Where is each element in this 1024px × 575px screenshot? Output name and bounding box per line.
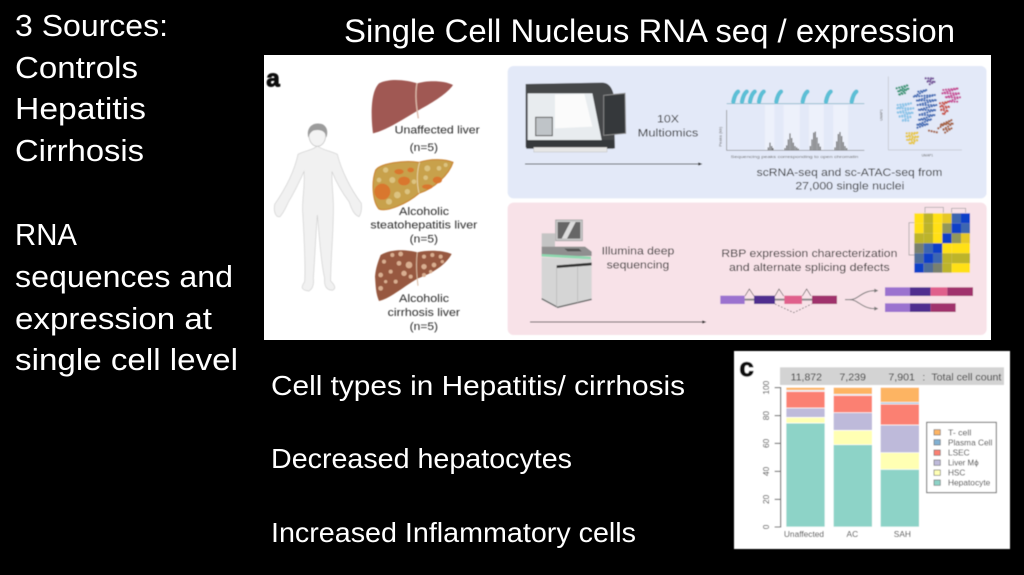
y axis: 40 (761, 466, 771, 476)
panel: patient cohort (266, 65, 480, 333)
legend: T- cell (948, 427, 971, 437)
text block: sources and RNA summary: RNA (15, 217, 77, 252)
label: scRNA-seq caption (757, 167, 942, 193)
label: RBP expression: RBP expression charecterization (721, 248, 897, 260)
chart: sequencing peaks: Sequencing peaks corresponding to open chromatin (731, 154, 858, 159)
y axis: 60 (761, 438, 771, 448)
legend: Hepatocyte (948, 478, 991, 488)
label: Illumina deep sequencing (602, 245, 674, 271)
total cell count band (780, 367, 1004, 385)
chart: heatmap (909, 207, 970, 273)
text block: sources and RNA summary (15, 8, 238, 377)
x axis labels: Unaffected (784, 529, 824, 539)
total cell count band: 11,872 (791, 372, 822, 383)
text block: sources and RNA summary: single cell level (15, 342, 238, 377)
total cell count band: 7,901 (888, 372, 915, 383)
legend (927, 422, 996, 493)
diagram: exon splicing (720, 289, 837, 313)
icon: human body (274, 124, 362, 291)
icon: unaffected liver (372, 80, 453, 133)
bar: AC (833, 387, 872, 527)
text block: sources and RNA summary: expression at (15, 301, 212, 336)
text block: cell type findings: Increased Inflammatory cells (271, 517, 636, 548)
arrow: alternate splicing fork (845, 289, 878, 311)
x axis labels: SAH (894, 529, 911, 539)
legend: Plasma Cell (948, 437, 992, 447)
y axis (761, 380, 781, 529)
total cell count band: 7,239 (839, 372, 866, 383)
bar: Unaffected (786, 387, 825, 527)
panel letter c: c (739, 352, 754, 382)
bar: SAH (880, 387, 919, 527)
label: alcoholic cirrhosis liver (388, 293, 460, 333)
title: Single Cell Nucleus RNA seq / expression (344, 13, 955, 49)
chart: sequencing peaks (718, 92, 864, 159)
y axis: 20 (761, 494, 771, 504)
y axis: 100 (761, 380, 771, 395)
panel: stacked bar chart c (734, 351, 1010, 549)
label: alcoholic steatohepatitis liver: Alcoholic (399, 206, 450, 218)
label: Illumina deep sequencing: sequencing (607, 259, 669, 271)
text block: cell type findings: Decreased hepatocytes (271, 443, 572, 474)
label: unaffected n: (n=5) (410, 142, 438, 154)
icon: Illumina sequencer (542, 220, 592, 308)
label: alcoholic steatohepatitis liver: steatohepatitis liver (370, 220, 478, 232)
text block: sources and RNA summary: Hepatitis (15, 91, 146, 126)
label: alcoholic cirrhosis liver: cirrhosis liver (388, 307, 460, 319)
x axis labels (784, 529, 911, 539)
chart: UMAP clusters: UMAP1 (922, 153, 933, 157)
legend: HSC (948, 468, 965, 478)
icon: steatohepatitis liver (373, 160, 453, 210)
label: 10X Multiomics: 10X (657, 114, 680, 126)
label: Illumina deep sequencing: Illumina deep (602, 245, 674, 257)
chart: UMAP clusters: UMAP1 (879, 109, 883, 121)
panel letter a: a (266, 65, 280, 92)
text block: cell type findings (271, 370, 685, 548)
icon: 10X instrument (526, 83, 626, 152)
label: alcoholic cirrhosis liver: Alcoholic (399, 293, 450, 305)
label: alcoholic steatohepatitis liver: (n=5) (410, 233, 438, 245)
label: alcoholic cirrhosis liver: (n=5) (410, 321, 438, 333)
diagram: spliced isoform one (885, 287, 973, 296)
label: unaffected liver: Unaffected liver (395, 125, 480, 137)
text block: sources and RNA summary: Cirrhosis (15, 133, 144, 168)
text block: cell type findings: Cell types in Hepatitis/ cirrhosis (271, 370, 685, 401)
label: 10X Multiomics: Multiomics (638, 127, 699, 139)
chart: sequencing peaks: Peaks (kb) (718, 126, 723, 147)
label: alcoholic steatohepatitis liver (370, 206, 478, 245)
arrow: 10X workflow (525, 162, 702, 166)
label: 10X Multiomics (638, 114, 699, 139)
y axis: 80 (761, 411, 771, 420)
total cell count band: Total cell count (931, 372, 1001, 383)
x axis labels: AC (847, 529, 858, 539)
panel: Illumina sequencing workflow (508, 203, 987, 335)
legend: Liver Mϕ (948, 458, 979, 468)
panel: 10X multiomics workflow (508, 66, 987, 198)
arrow: Illumina workflow (530, 320, 706, 324)
legend: LSEC (948, 448, 970, 458)
label: scRNA-seq caption: 27,000 single nuclei (795, 181, 904, 193)
label: scRNA-seq caption: scRNA-seq and sc-ATAC-seq from (757, 167, 942, 179)
text block: sources and RNA summary: Controls (15, 50, 138, 85)
chart: UMAP clusters (879, 77, 962, 157)
text block: sources and RNA summary: sequences and (15, 259, 233, 294)
total cell count band: : (922, 372, 925, 383)
panel: study design figure a (264, 55, 991, 340)
text block: sources and RNA summary: 3 Sources: (15, 8, 168, 43)
diagram: spliced isoform two (885, 303, 956, 312)
label: RBP expression: and alternate splicing defects (729, 262, 890, 274)
y axis: 0 (761, 524, 771, 529)
label: RBP expression (721, 248, 897, 274)
icon: cirrhosis liver (375, 250, 452, 301)
